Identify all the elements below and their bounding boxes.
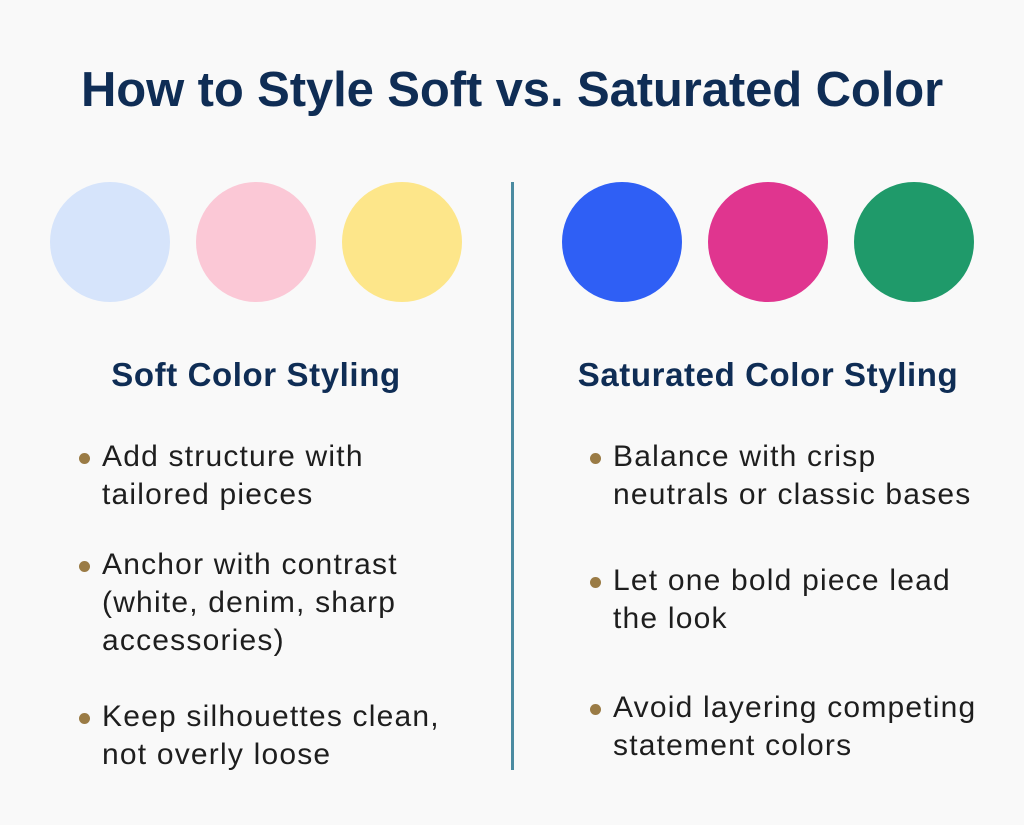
bullet 2: (white, denim, sharp xyxy=(102,586,396,619)
bullet 1: tailored pieces xyxy=(102,478,313,511)
sat swatch green xyxy=(854,182,974,302)
divider xyxy=(511,182,514,770)
sat swatch magenta xyxy=(708,182,828,302)
sat swatch blue xyxy=(562,182,682,302)
title: How to Style Soft vs. Saturated Color xyxy=(81,63,943,117)
bullet 3 xyxy=(613,689,976,765)
heading saturated: Saturated Color Styling xyxy=(578,356,958,393)
bullet 1: neutrals or classic bases xyxy=(613,478,971,511)
bullet 2: Let one bold piece lead xyxy=(613,564,951,597)
bullet 2: the look xyxy=(613,602,728,635)
bullet 2: Anchor with contrast xyxy=(102,548,398,581)
bullet 2: accessories) xyxy=(102,624,285,657)
heading soft: Soft Color Styling xyxy=(111,356,401,393)
bullet 3: not overly loose xyxy=(102,738,331,771)
soft swatch blue xyxy=(50,182,170,302)
panel: saturated xyxy=(562,182,976,762)
bullet 1 xyxy=(102,438,364,514)
bullet 1 xyxy=(613,438,971,514)
bullet 3: Keep silhouettes clean, xyxy=(102,700,440,733)
bullet 3: statement colors xyxy=(613,729,852,762)
bullet 1: Balance with crisp xyxy=(613,440,876,473)
bullet 2 xyxy=(102,546,398,660)
bullet 2 xyxy=(613,562,951,638)
soft swatch yellow xyxy=(342,182,462,302)
bullet 3 xyxy=(102,698,440,774)
bullet 1: Add structure with xyxy=(102,440,364,473)
bullet 3: Avoid layering competing xyxy=(613,691,976,724)
panel: soft xyxy=(50,182,462,771)
soft swatch pink xyxy=(196,182,316,302)
